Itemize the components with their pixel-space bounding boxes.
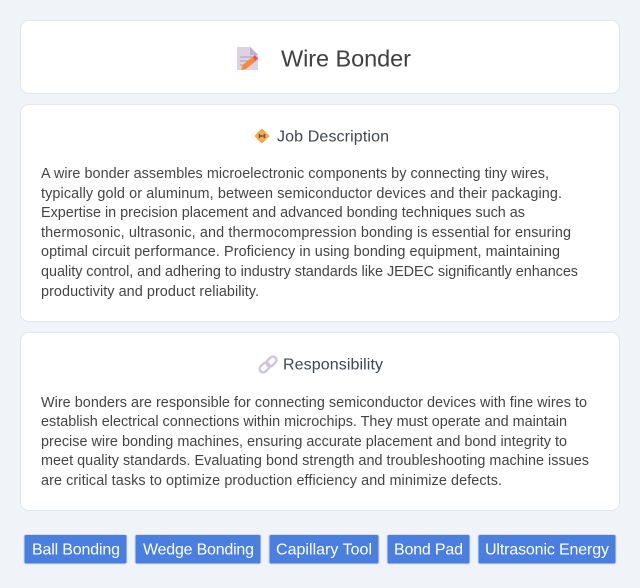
- text block: job description: productivity and product reliability.: [41, 284, 259, 300]
- text block: job description: quality control, and adhering to industry standards like JEDEC significantly enhances: [41, 264, 578, 280]
- text block: responsibility: [41, 395, 589, 489]
- panel: job description: [20, 104, 620, 322]
- text block: responsibility: establish electrical connections within microchips. They must operate and maintain: [41, 414, 567, 430]
- text block: job description: Expertise in precision placement and advanced bonding techniques such as: [41, 205, 525, 221]
- panel: title: [20, 20, 620, 94]
- tag: ball bonding: [24, 534, 127, 564]
- heading: job description: Job Description: [277, 128, 389, 146]
- icon: document with pencil: [237, 47, 258, 70]
- tag: ultrasonic energy: Ultrasonic Energy: [485, 542, 609, 558]
- tag: bond pad: Bond Pad: [394, 542, 463, 558]
- tag: capillary tool: Capillary Tool: [276, 542, 372, 558]
- text block: responsibility: Wire bonders are responsible for connecting semiconductor devices with fine wires to: [41, 395, 587, 411]
- tag: ball bonding: Ball Bonding: [32, 542, 120, 558]
- text block: responsibility: precise wire bonding machines, ensuring accurate placement and bond integrity to: [41, 434, 567, 450]
- text block: responsibility: meet quality standards. Evaluating bond strength and troubleshooting machine issues: [41, 453, 589, 469]
- title text: Wire Bonder: [281, 46, 411, 72]
- text block: job description: A wire bonder assembles microelectronic components by connecting tiny wires,: [41, 166, 549, 182]
- tag: bond pad: [387, 534, 470, 564]
- text block: responsibility: are critical tasks to optimize production efficiency and minimize defects.: [41, 473, 502, 489]
- heading: responsibility: Responsibility: [283, 356, 383, 374]
- tag: wedge bonding: [135, 534, 261, 564]
- text block: job description: typically gold or aluminum, between semiconductor devices and their packaging.: [41, 186, 562, 202]
- tag: capillary tool: [269, 534, 379, 564]
- text block: job description: optimal circuit performance. Proficiency in using bonding equipment, maintaining: [41, 244, 560, 260]
- panel: responsibility: [20, 332, 620, 510]
- icon: chain link: [258, 355, 278, 374]
- tag: wedge bonding: Wedge Bonding: [143, 542, 254, 558]
- icon: diamond sign: [254, 128, 270, 144]
- text block: job description: thermosonic, ultrasonic, and thermocompression bonding is essential for ensuring: [41, 225, 571, 241]
- text block: job description: [41, 166, 578, 300]
- tag: ultrasonic energy: [478, 534, 616, 564]
